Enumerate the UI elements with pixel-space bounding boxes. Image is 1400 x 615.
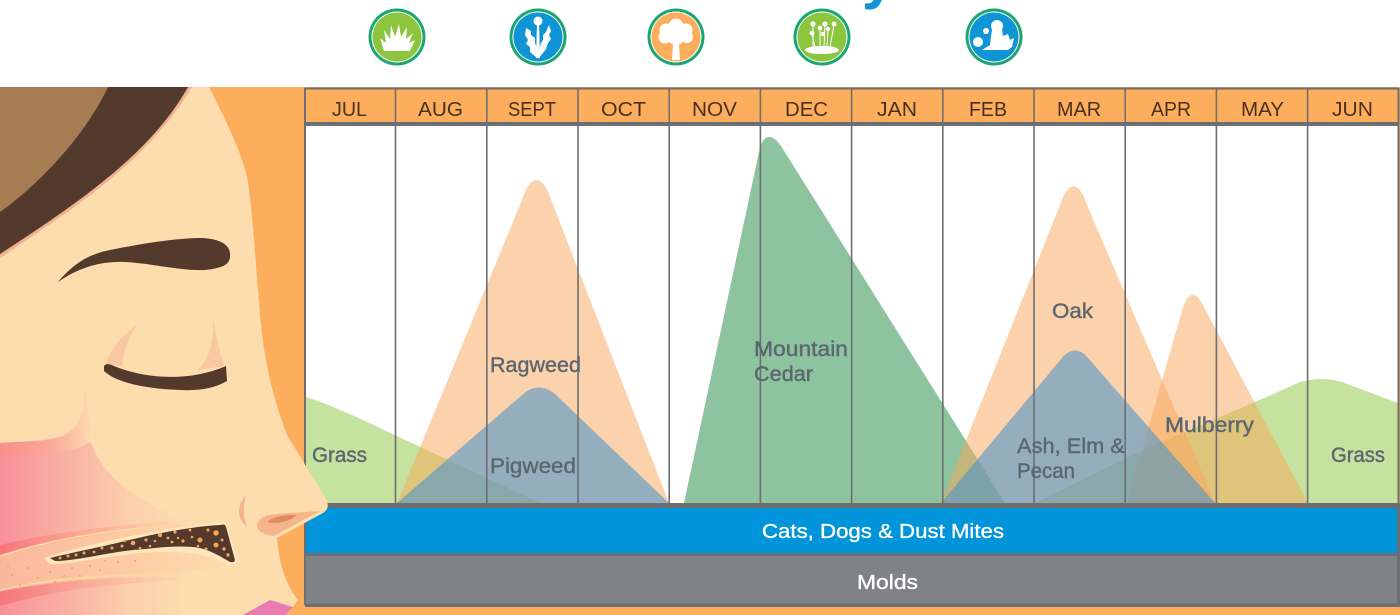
chart plot area — [306, 126, 1398, 504]
chart labels: Oak — [1052, 300, 1094, 323]
month header — [305, 88, 1399, 122]
chart labels: Ash, Elm & — [1017, 435, 1125, 458]
bar: molds — [305, 553, 1400, 607]
icon: weed — [510, 8, 566, 66]
month header: FEB — [969, 99, 1007, 121]
chart labels: Grass — [312, 444, 367, 467]
area: mulberry — [1127, 295, 1308, 503]
chart labels: Grass — [1331, 444, 1385, 467]
bar: cats dogs dust mites — [305, 503, 1400, 556]
sinus stripe — [0, 382, 97, 458]
calendar chart — [304, 88, 1400, 607]
month header: MAR — [1057, 99, 1101, 121]
nose wing crease — [239, 495, 247, 527]
eyebrow — [58, 238, 230, 282]
month header: DEC — [785, 99, 828, 121]
chart labels: Cedar — [754, 363, 813, 386]
chart labels: Mulberry — [1165, 414, 1255, 437]
chart labels: Ragweed — [490, 354, 581, 377]
icon row — [368, 8, 1022, 66]
chart labels: Pecan — [1017, 460, 1075, 483]
nasal passage — [0, 520, 240, 606]
area: ash elm pecan — [941, 350, 1215, 503]
bar: molds: Molds — [857, 572, 918, 594]
chart labels — [312, 300, 1385, 483]
nostril — [257, 511, 320, 536]
area: ragweed — [397, 180, 669, 503]
month header: SEPT — [508, 99, 556, 121]
sinus redness — [0, 440, 215, 615]
month header: NOV — [692, 99, 738, 121]
chart labels: Pigweed — [490, 455, 576, 478]
face illustration — [0, 87, 328, 615]
area: grass right — [1035, 379, 1398, 503]
icon: grass — [368, 8, 426, 66]
area: grass left — [305, 397, 540, 503]
month header: APR — [1151, 99, 1191, 121]
area: oak — [941, 186, 1215, 503]
area: mountain cedar — [684, 137, 1005, 503]
area: pigweed — [397, 388, 669, 503]
mucus border — [44, 521, 239, 566]
month header: JUN — [1332, 99, 1373, 121]
month header: OCT — [601, 99, 646, 121]
passage dots — [7, 559, 136, 586]
face shape — [0, 87, 328, 615]
month header: MAY — [1241, 99, 1284, 121]
month header: AUG — [418, 99, 463, 121]
chart frame — [304, 88, 1399, 606]
eye crease — [106, 317, 224, 370]
mucus dots — [59, 528, 230, 559]
icon: flowers — [794, 8, 850, 66]
month header: JUL — [332, 99, 367, 121]
bar: cats dogs dust mites: Cats, Dogs & Dust Mites — [762, 521, 1004, 543]
mucus — [50, 525, 235, 562]
lips — [243, 600, 293, 615]
icon: tree — [648, 8, 704, 66]
month header: JAN — [877, 99, 917, 121]
icon: pets and dust — [966, 8, 1022, 66]
hair — [0, 87, 192, 258]
chart labels: Mountain — [754, 338, 848, 361]
closed eye — [104, 364, 227, 390]
